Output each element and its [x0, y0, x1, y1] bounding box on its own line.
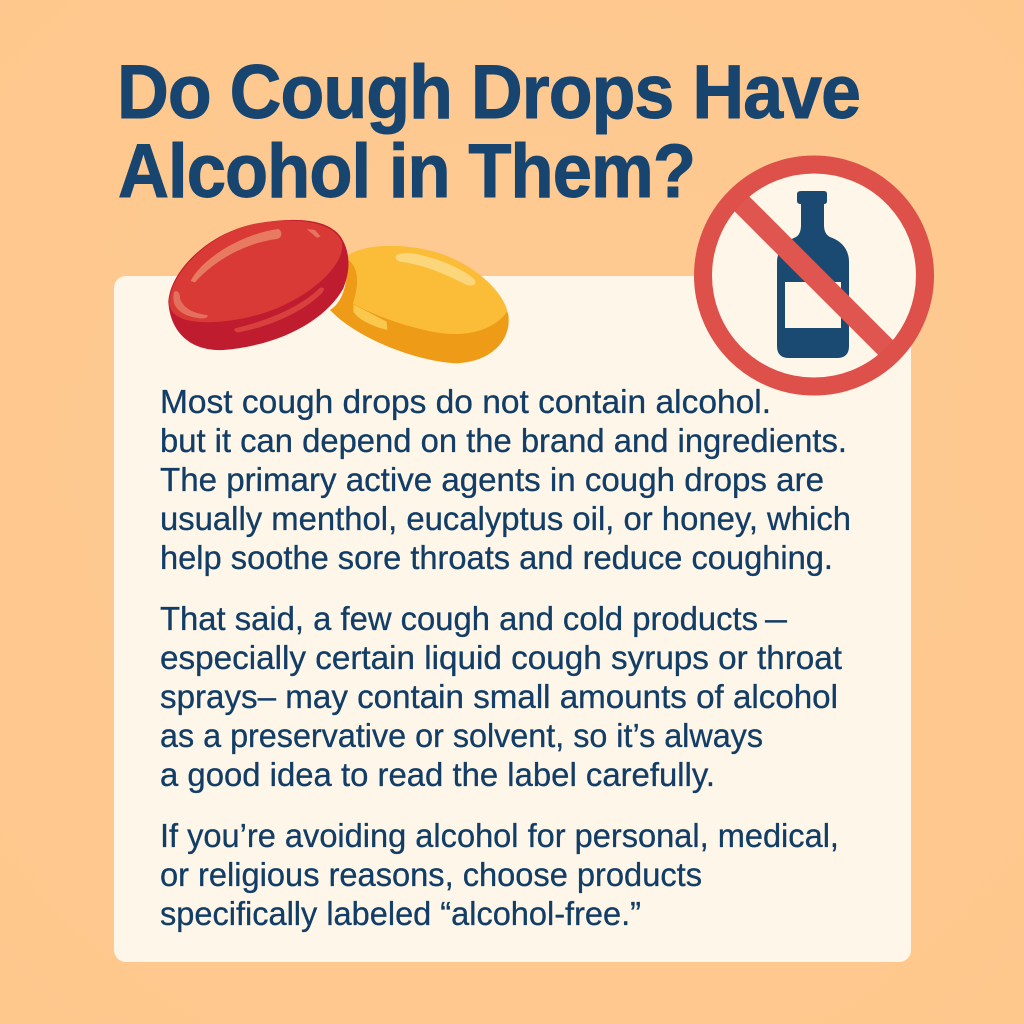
text block: paragraph 3: specifically labeled “alcohol-free.” [160, 895, 641, 932]
text block: paragraph 1: The primary active agents in cough drops are [160, 461, 824, 498]
text block: paragraph 1: but it can depend on the brand and ingredients. [160, 422, 847, 459]
text block: paragraph 3: If you’re avoiding alcohol for personal, medical, [160, 817, 839, 854]
yellow drop [330, 246, 509, 363]
text block: paragraph 1: help soothe sore throats and reduce coughing. [160, 539, 833, 576]
bottle [777, 191, 849, 358]
text block: paragraph 2: That said, a few cough and cold products [160, 600, 758, 637]
icon: cough drops [168, 220, 509, 363]
title: Alcohol in Them? [118, 129, 695, 214]
panel: text card [114, 276, 911, 962]
prohibition ring [703, 164, 925, 386]
text block: paragraph 3: or religious reasons, choose products [160, 856, 702, 893]
text block: paragraph 2: sprays– may contain small amounts of alcohol [160, 678, 838, 715]
title [117, 50, 860, 214]
text block: paragraph 3 [160, 817, 839, 932]
text block: paragraph 2: — [765, 600, 787, 637]
title: Do Cough Drops Have [117, 50, 860, 135]
text block: paragraph 1: usually menthol, eucalyptus oil, or honey, which [160, 500, 851, 537]
text block: paragraph 2: as a preservative or solvent, so it’s always [160, 717, 763, 754]
text block: paragraph 2: especially certain liquid cough syrups or throat [160, 639, 842, 676]
bottle label [785, 282, 841, 328]
prohibition slash [738, 200, 888, 350]
text block: paragraph 1 [160, 383, 851, 576]
icon: no alcohol sign [703, 164, 925, 386]
text block: paragraph 2: a good idea to read the label carefully. [160, 756, 715, 793]
text block: paragraph 1: Most cough drops do not contain alcohol. [160, 383, 771, 420]
red drop [168, 220, 348, 350]
text block: paragraph 2 [160, 600, 842, 793]
